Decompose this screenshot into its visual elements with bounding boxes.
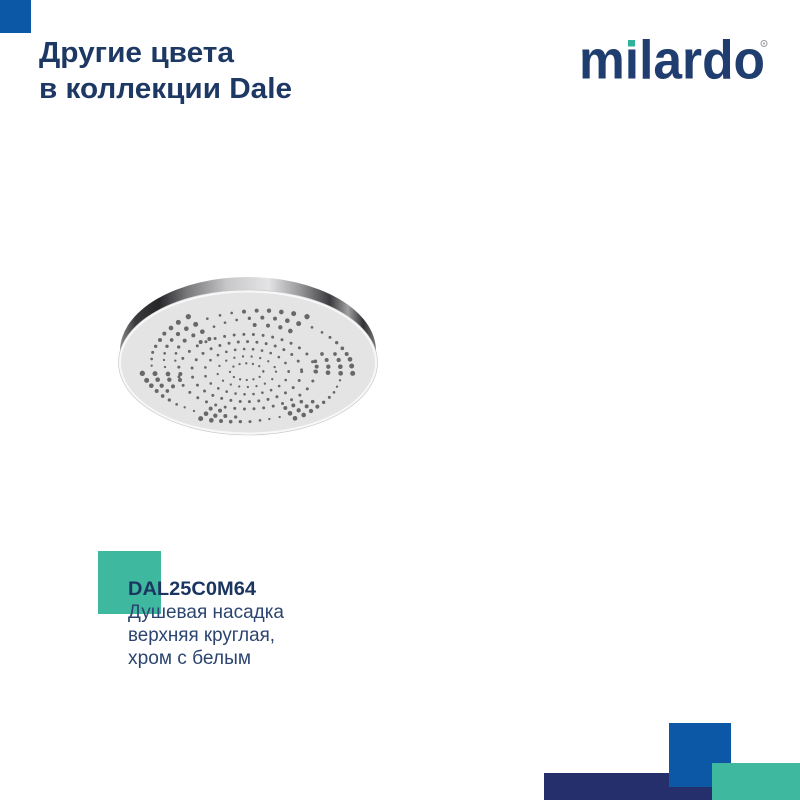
shower head white edge (118, 290, 378, 435)
decorative blocks: bottom right (544, 723, 800, 800)
product image: round shower head (118, 277, 378, 435)
decorative square: teal behind product caption (98, 551, 161, 614)
product description: хром с белым (128, 647, 251, 669)
title: в коллекции Dale (39, 73, 292, 105)
product description (128, 601, 284, 669)
title: Другие цвета (39, 37, 235, 69)
shower head metal rim (120, 277, 376, 425)
product caption (128, 578, 284, 669)
decorative square: top left (0, 0, 31, 33)
spray nozzles (140, 308, 355, 423)
product code: DAL25C0M64 (128, 578, 256, 600)
product description: Душевая насадка (128, 601, 284, 623)
product description: верхняя круглая, (128, 624, 275, 646)
title (39, 37, 292, 105)
logo: milardo: milardo (579, 28, 765, 90)
shower head face (121, 292, 375, 432)
